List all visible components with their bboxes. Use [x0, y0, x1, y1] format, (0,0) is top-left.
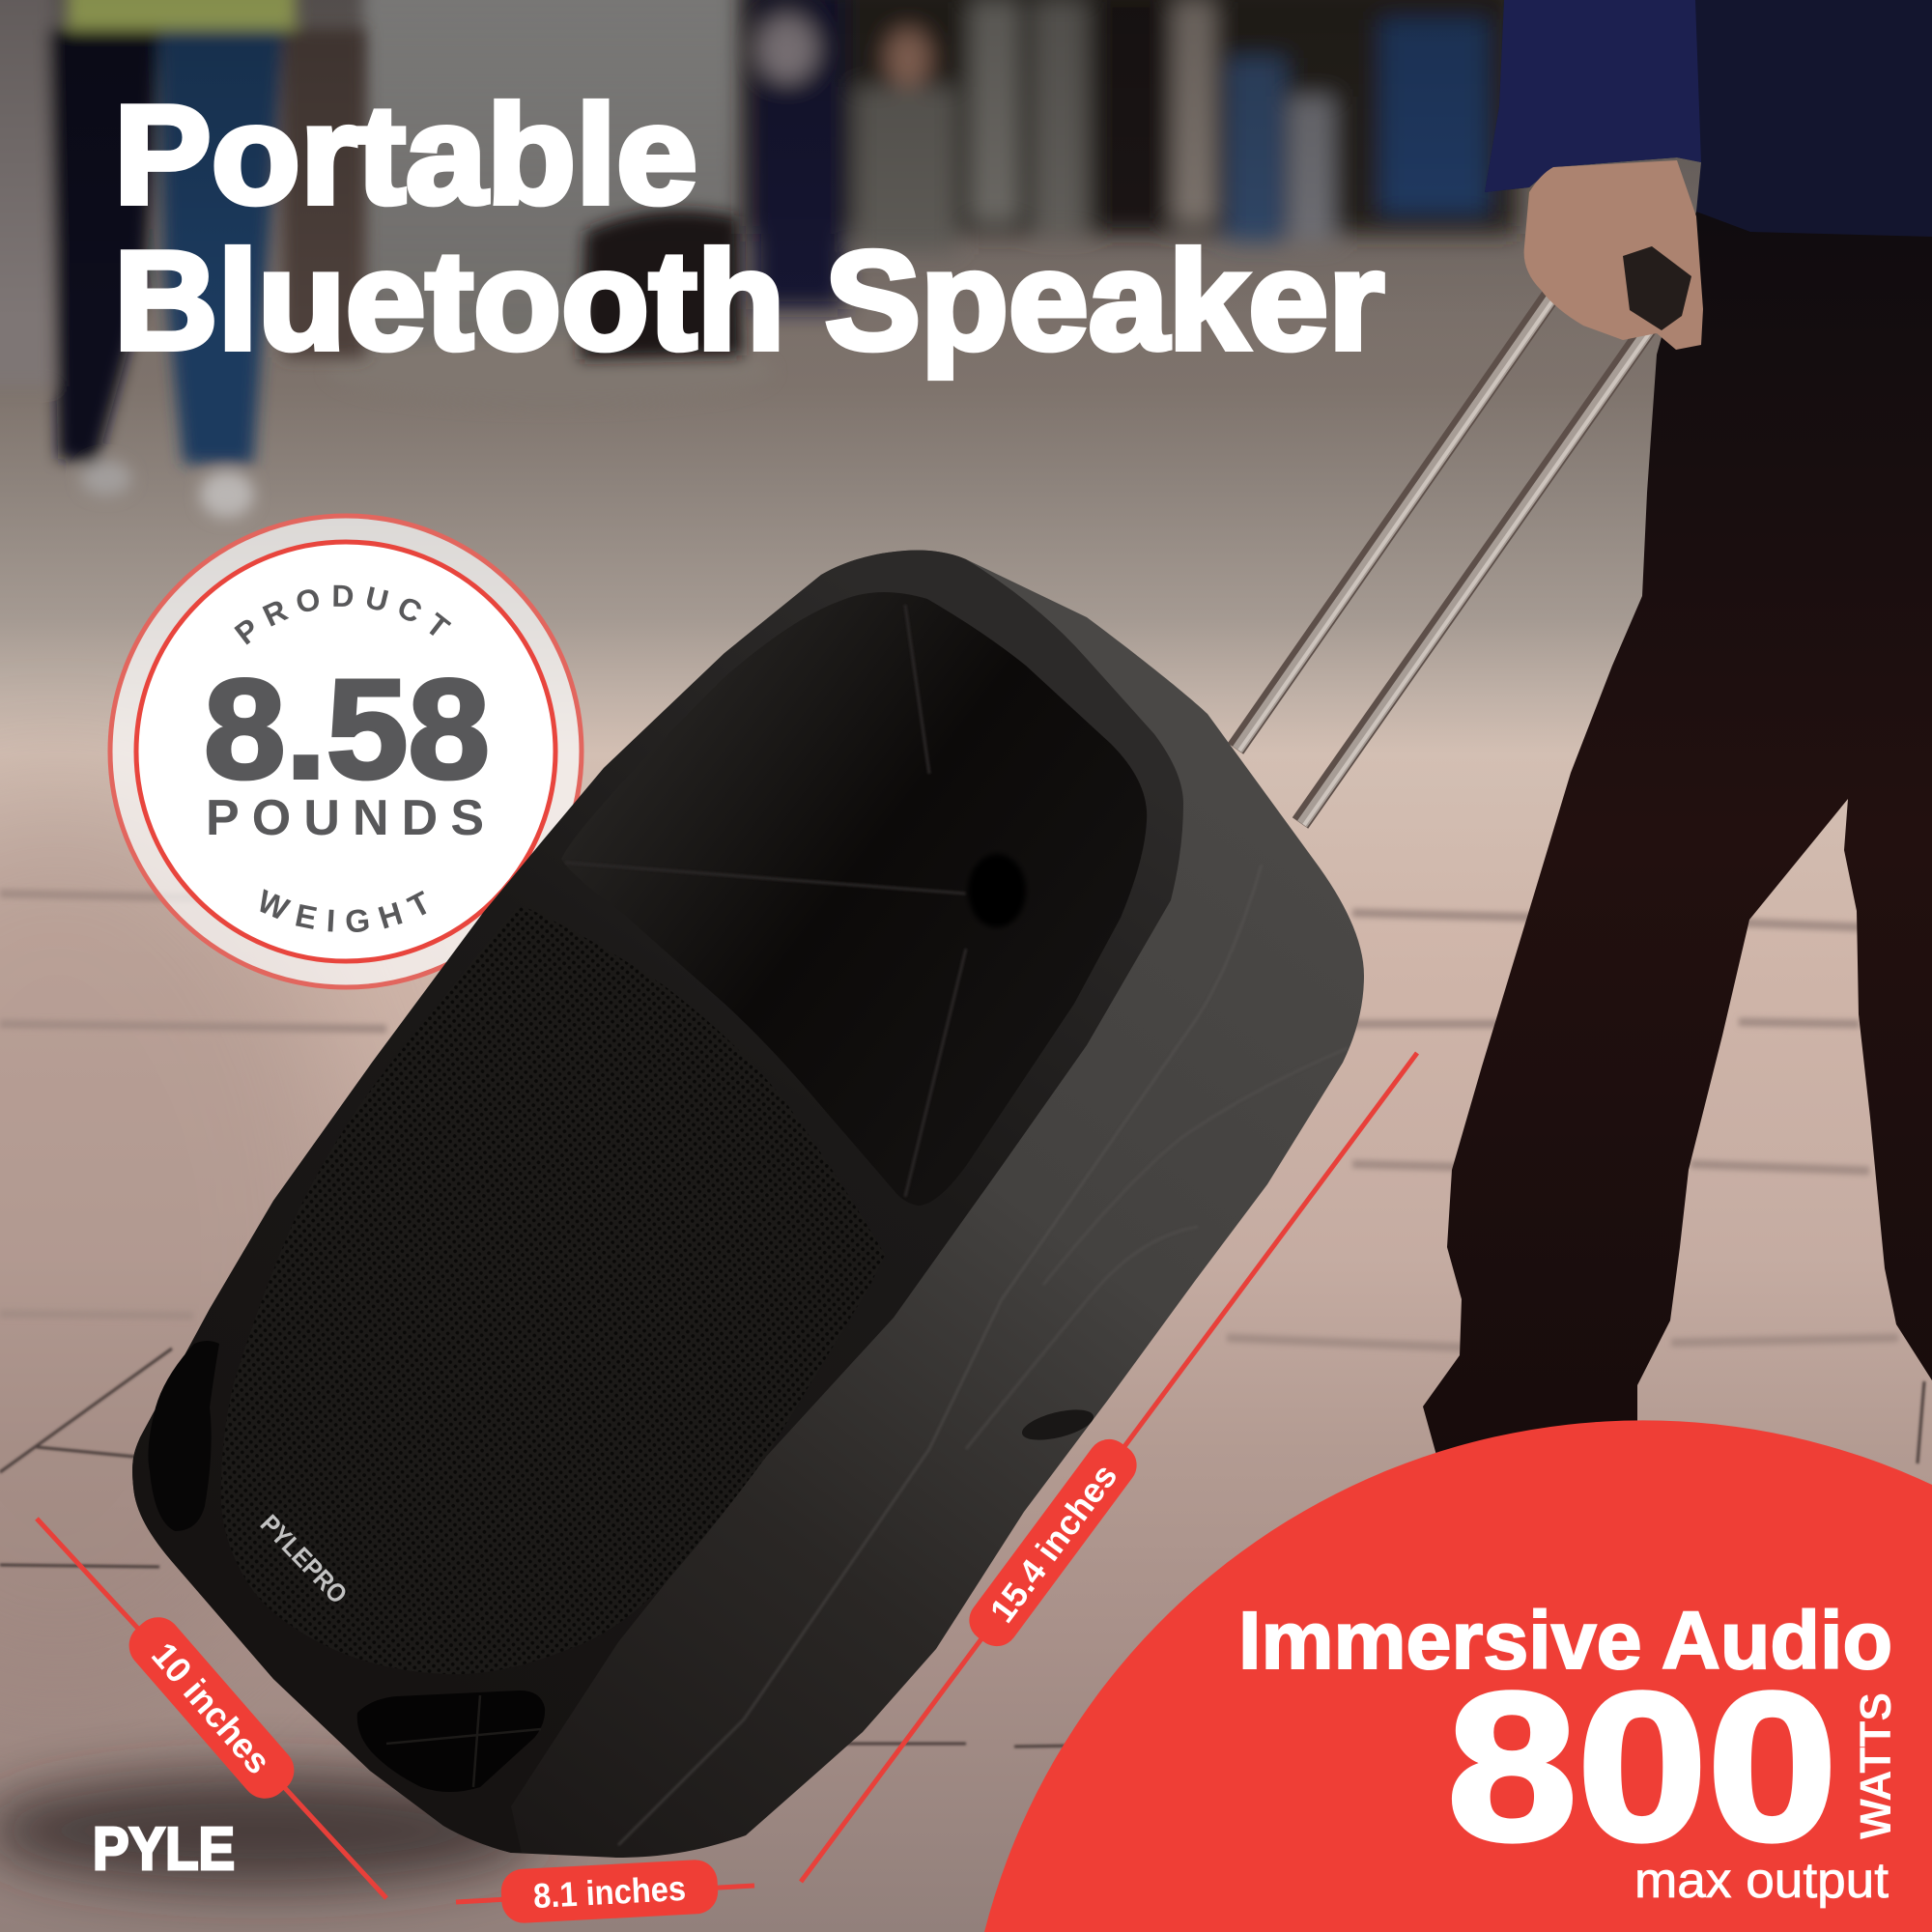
- red corner shape: [984, 1420, 1932, 1932]
- grille logo: PYLEPRO: PYLEPRO: [255, 1509, 353, 1609]
- handle grip: [1623, 246, 1691, 330]
- text: Immersive Audio: Immersive Audio: [1238, 1595, 1892, 1686]
- speaker front face: [132, 550, 1183, 1853]
- pill: 15.4 inches: [961, 1431, 1145, 1655]
- title: [114, 76, 1384, 379]
- speaker: [132, 550, 1364, 1858]
- pill: 15.4 inches: 15.4 inches: [981, 1457, 1124, 1630]
- speaker grille: [221, 907, 885, 1674]
- pill: 8.1 inches: [500, 1859, 719, 1924]
- number: 8.58: 8.58: [204, 650, 490, 808]
- brand logo: PYLE: PYLE: [93, 1816, 235, 1883]
- panel: audio power callout: [984, 1420, 1932, 1932]
- pavement cracks: [0, 1349, 1924, 1932]
- pavement joints: [0, 894, 1898, 1348]
- person: trousers: [1423, 212, 1932, 1459]
- dimension: width line and pill: [456, 1859, 754, 1924]
- text: max output: max output: [1634, 1853, 1889, 1909]
- number: 800: 800: [1447, 1650, 1837, 1885]
- blurred bag: [580, 211, 742, 359]
- blurred bystander: [0, 0, 365, 518]
- badge outer ring: [110, 516, 582, 987]
- bottom port vent: [357, 1690, 545, 1792]
- label: WEIGHT: WEIGHT: [260, 889, 427, 932]
- pill: 8.1 inches: 8.1 inches: [532, 1868, 687, 1916]
- unit: WATTS: WATTS: [1851, 1692, 1900, 1839]
- speaker side contour: [618, 865, 1262, 1845]
- top dark gradient: [0, 0, 1932, 319]
- pill: 10 inches: 10 inches: [144, 1635, 278, 1781]
- horn ridge lines: [565, 605, 966, 1197]
- horn throat: [968, 854, 1026, 927]
- dimension: height line and pill: [801, 1053, 1417, 1882]
- side handle slot: [148, 1341, 219, 1531]
- dimension: depth line and pill: [37, 1519, 386, 1898]
- blurred crowd: [744, 0, 1517, 309]
- title line: Bluetooth Speaker: Bluetooth Speaker: [114, 222, 1384, 379]
- side foot: [1019, 1404, 1096, 1446]
- blurred pillar: [328, 0, 773, 407]
- person: hand: [1524, 160, 1703, 350]
- label: PRODUCT: PRODUCT: [234, 585, 452, 645]
- title line: Portable: Portable: [114, 76, 697, 233]
- badge inner disc: [136, 542, 555, 961]
- pill: 10 inches: [120, 1607, 303, 1808]
- speaker horn: [561, 592, 1147, 1206]
- person: jacket sleeve: [1485, 0, 1701, 192]
- person: jacket: [1485, 0, 1932, 237]
- label: POUNDS: POUNDS: [206, 790, 484, 846]
- speaker side swirl: [966, 1048, 1348, 1449]
- trolley handle: [1236, 269, 1670, 825]
- speaker body: [132, 550, 1364, 1858]
- speaker ground shadow: [0, 1773, 541, 1889]
- person: [1236, 0, 1932, 1459]
- panel: product weight badge: [108, 514, 583, 989]
